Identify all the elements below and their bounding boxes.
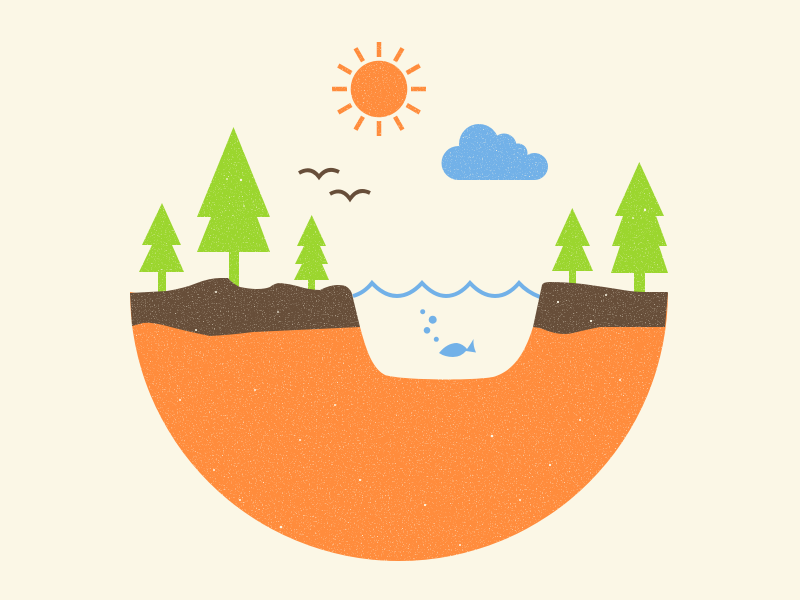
- sun rays: [332, 42, 426, 136]
- tree: large: [197, 127, 270, 290]
- water waves: [353, 283, 540, 297]
- bird 2: [330, 191, 370, 199]
- tree: right large: [611, 162, 668, 296]
- tree: three-tier small: [294, 215, 329, 292]
- birds: [299, 170, 370, 199]
- bubbles: [420, 309, 439, 342]
- speckle highlights: [179, 178, 646, 546]
- fish: [439, 339, 476, 357]
- tree: left small: [139, 203, 184, 296]
- bird 1: [299, 170, 339, 177]
- soil: left bank: [130, 278, 360, 336]
- sun: [332, 42, 426, 136]
- cloud: [442, 124, 548, 180]
- sun disc: [351, 61, 407, 117]
- trees: [139, 127, 668, 296]
- soil: right bank: [533, 282, 668, 334]
- tree: right small: [552, 208, 593, 288]
- ground: orange subsoil with lake basin: [130, 292, 668, 561]
